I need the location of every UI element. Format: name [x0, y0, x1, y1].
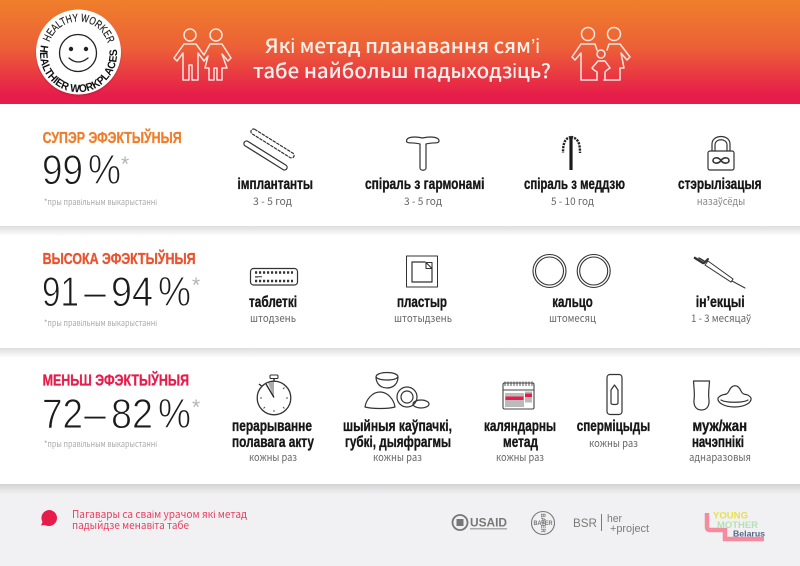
heading: highly effective: ВЫСОКА ЭФЭКТЫЎНЫЯ: [43, 248, 196, 268]
percentage: 99: [42, 146, 121, 193]
frequency: кожны раз: [589, 436, 638, 451]
icon: caps and sponges: [365, 372, 429, 408]
label: губкі, дыяфрагмы: [345, 434, 451, 451]
item: hormonal IUD: [365, 137, 484, 209]
percentage: 99: %: [88, 146, 121, 193]
panel: footer: [0, 484, 800, 566]
logo: Young Mother Belarus: Belarus: [733, 528, 765, 538]
item: spermicides: [577, 374, 650, 451]
percentage: 72-82: –: [84, 390, 107, 437]
icon: calendar: [503, 382, 534, 409]
frequency: кожны раз: [249, 450, 297, 465]
callout text: [72, 507, 247, 533]
logo: Bayer: [532, 512, 554, 534]
label: спіраль з меддзю: [524, 176, 625, 193]
percentage: 99: 99: [42, 146, 83, 193]
heading: super effective: СУПЭР ЭФЭКТЫЎНЫЯ: [43, 127, 182, 147]
item: condoms: [689, 381, 751, 465]
percentage: 72-82: %: [158, 390, 191, 437]
title: табе найбольш падыходзіць?: [253, 55, 551, 84]
logo: Young Mother Belarus: MOTHER: [717, 520, 759, 530]
label: сперміцыды: [577, 418, 650, 435]
logo: Bayer: BAYER: [539, 514, 545, 533]
percentage: 91-94: –: [84, 268, 107, 315]
frequency: штодзень: [250, 311, 296, 326]
panel: less effective: [42, 370, 751, 465]
label: каляндарны: [484, 418, 556, 435]
label: перарыванне: [232, 418, 312, 435]
frequency: кожны раз: [373, 450, 422, 465]
icon: couple: [174, 29, 231, 80]
item: sterilisation: [678, 136, 762, 209]
item: pills: [249, 268, 298, 326]
icon: copper IUD: [563, 137, 580, 170]
label: імплантанты: [238, 176, 313, 193]
label: полавага акту: [232, 434, 314, 451]
percentage: 72-82: 82: [111, 390, 153, 437]
label: кальцо: [552, 294, 593, 311]
percentage: 91-94: 91: [42, 268, 79, 315]
icon: spermicide tube: [607, 374, 622, 414]
heading: less effective: МЕНЬШ ЭФЭКТЫЎНЫЯ: [43, 370, 189, 390]
item: copper IUD: [524, 137, 625, 209]
item: ring: [533, 254, 610, 326]
icon: implants: [243, 128, 295, 171]
label: спіраль з гармонамі: [365, 176, 484, 193]
logo: USAID: USAID: [470, 516, 507, 530]
label: [484, 418, 556, 451]
frequency: штотыдзень: [394, 311, 452, 326]
title: Які метад планавання сям ’і: [265, 30, 540, 59]
title: [253, 30, 551, 84]
duration: 3 - 5 год: [404, 194, 442, 209]
footnote: *пры правільным выкарыстанні: [44, 317, 157, 329]
callout text: падыйдзе менавіта табе: [72, 518, 189, 533]
icon: hormonal IUD: [406, 137, 439, 170]
item: injection: [691, 258, 752, 326]
label: [232, 418, 314, 451]
label: шыйныя каўпачкі,: [343, 418, 452, 435]
percentage: 72-82: 72: [42, 390, 83, 437]
item: calendar method: [484, 382, 556, 465]
logo: USAID: [452, 515, 507, 530]
asterisk: *: [192, 396, 200, 419]
item: implants: [238, 128, 313, 209]
logo: Young Mother Belarus: [707, 510, 765, 539]
icon: stopwatch: [257, 375, 291, 415]
label: [343, 418, 452, 451]
label: пластыр: [397, 294, 447, 311]
logo: healthy worker: HEALTHY WORKER: [42, 14, 114, 44]
label: стэрылізацыя: [678, 176, 762, 193]
frequency: кожны раз: [496, 450, 544, 465]
frequency: штомесяц: [549, 311, 596, 326]
percentage: 91-94: %: [158, 268, 191, 315]
label: муж/жан: [692, 418, 747, 435]
label: [692, 418, 747, 451]
panel: header: [0, 0, 800, 104]
item: patch: [394, 256, 452, 326]
item: withdrawal: [232, 375, 314, 465]
duration: 5 - 10 год: [551, 194, 594, 209]
label: начэпнікі: [692, 434, 744, 451]
icon: speech bubble: [41, 510, 57, 526]
logo: Bayer: BAYER: [534, 521, 553, 527]
icon: rings: [533, 254, 610, 288]
footnote: *пры правільным выкарыстанні: [44, 438, 157, 450]
panel: super effective: [42, 127, 762, 209]
item: caps, sponges, diaphragms: [343, 372, 452, 465]
percentage: 72-82: [42, 390, 191, 437]
icon: family: [572, 28, 630, 80]
percentage: 91-94: [42, 268, 191, 315]
icon: syringe: [695, 258, 745, 288]
icon: patch: [406, 256, 438, 287]
logo: BSR HERproject: her: [607, 513, 622, 525]
label: метад: [503, 434, 538, 451]
icon: padlock with infinity: [708, 136, 734, 170]
percentage: 91-94: 94: [111, 268, 153, 315]
icon: condoms: [694, 381, 751, 410]
duration: назаўсёды: [697, 194, 745, 209]
frequency: 1 - 3 месяцаў: [691, 311, 752, 326]
duration: 3 - 5 год: [253, 194, 292, 209]
panel: highly effective: [42, 248, 752, 329]
callout text: Пагавары са сваім урачом які метад: [72, 507, 247, 522]
logo: Young Mother Belarus: YOUNG: [713, 510, 748, 520]
frequency: аднаразовыя: [689, 450, 751, 465]
footnote: *пры правільным выкарыстанні: [44, 196, 157, 208]
asterisk: *: [121, 153, 129, 176]
asterisk: *: [192, 274, 200, 297]
logo: healthy worker: HEALTHIER WORKPLACES: [40, 46, 118, 92]
label: ін’екцыі: [696, 294, 745, 311]
logo: BSR HERproject: +project: [610, 523, 649, 535]
logo: BSR HERproject: [573, 513, 649, 535]
icon: pill pack: [250, 268, 298, 285]
logo: healthy worker: [36, 10, 122, 96]
label: таблеткі: [249, 294, 297, 311]
logo: BSR HERproject: BSR: [573, 516, 597, 530]
